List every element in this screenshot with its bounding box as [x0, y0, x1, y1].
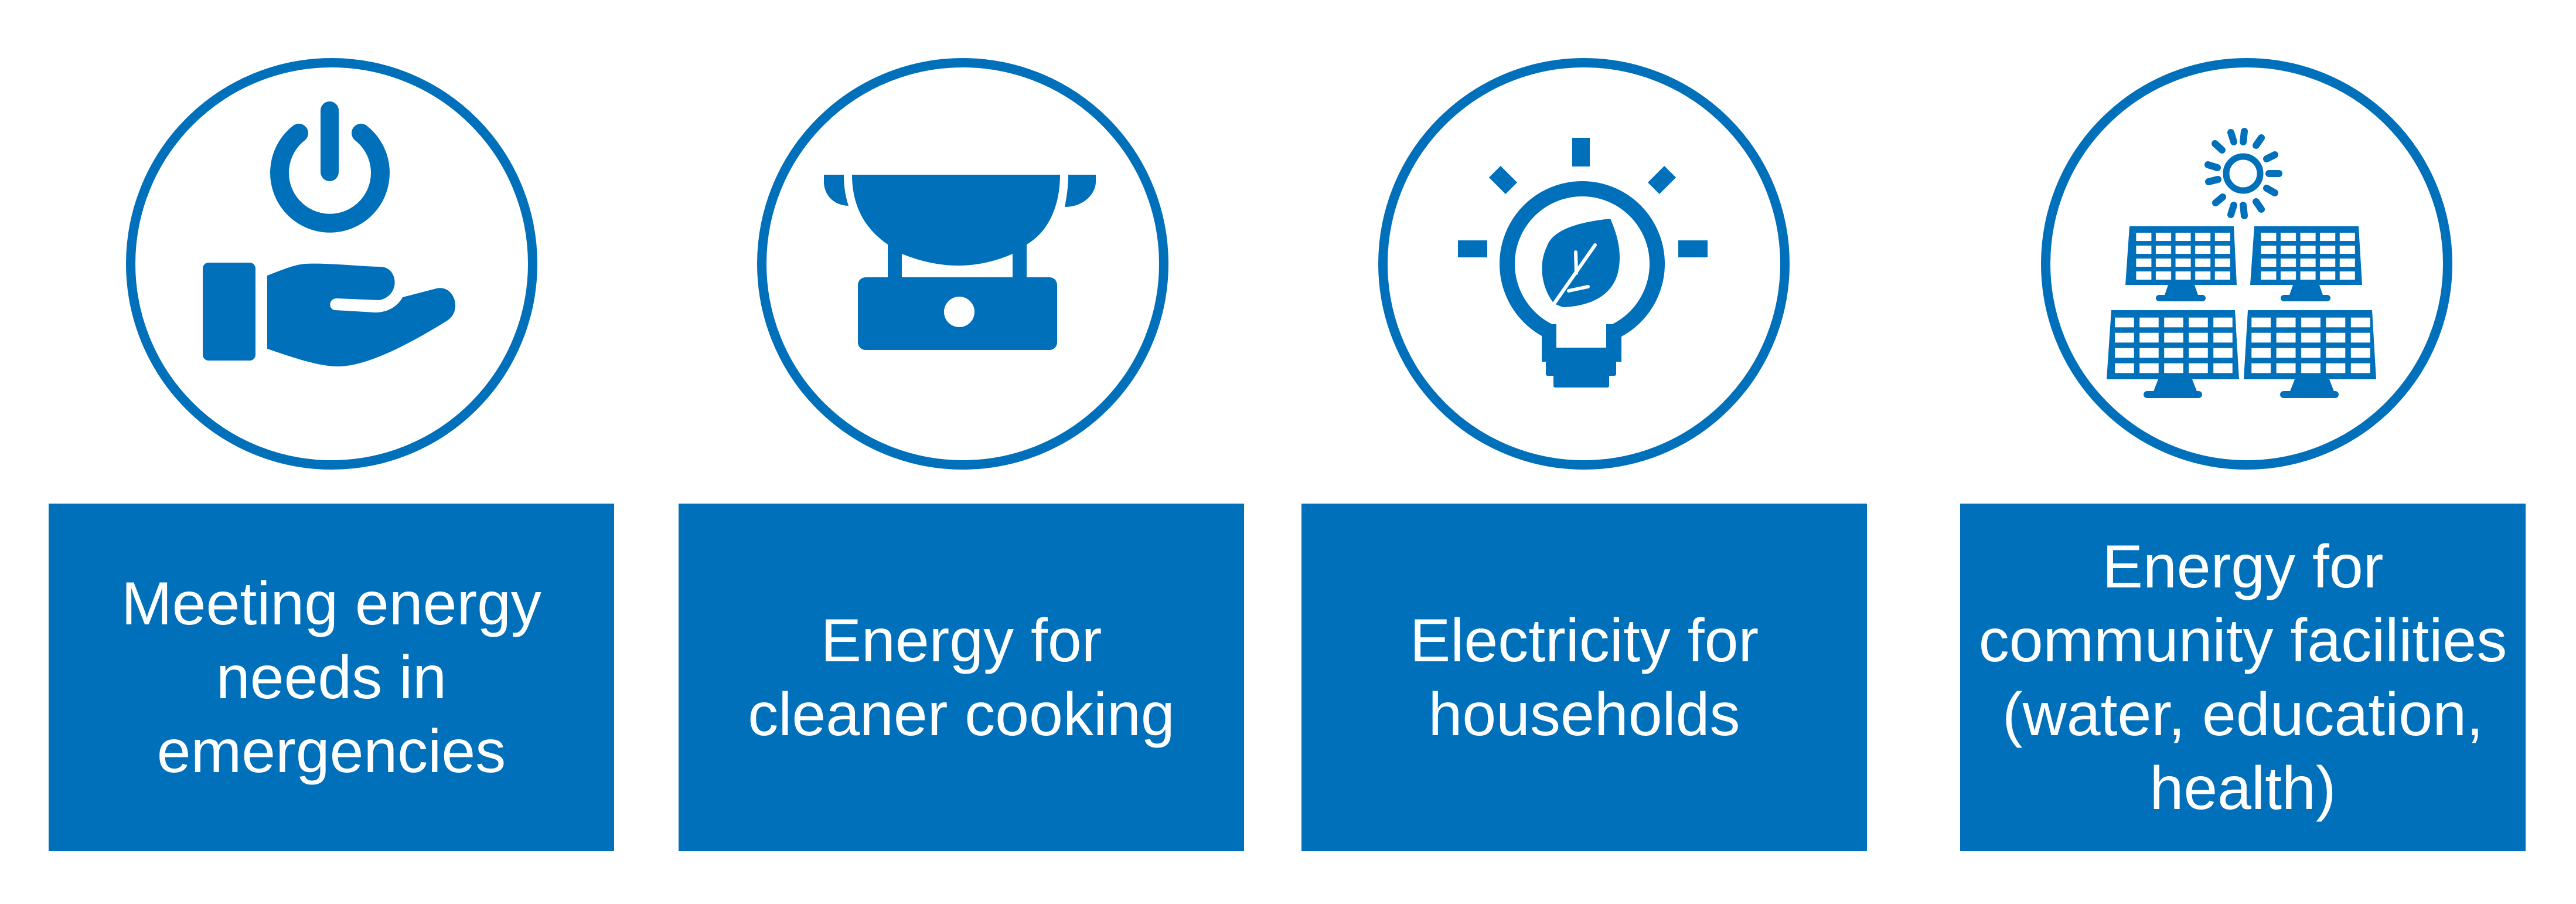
box: households: Electricity for	[1410, 606, 1759, 674]
icon: power symbol	[280, 101, 380, 223]
icon: pot on stove	[824, 175, 1096, 350]
box: community facilities	[1960, 504, 2526, 851]
icon circle 3: light bulb	[1383, 63, 1785, 465]
box: cooking: Energy for	[821, 606, 1102, 674]
icon: bulb with leaf	[1458, 138, 1708, 388]
icon circle 1: power in hand	[131, 63, 533, 465]
box: households	[1301, 504, 1867, 851]
box: community facilities: (water, education,	[2002, 680, 2483, 748]
box: community facilities: community facilities	[1979, 606, 2507, 674]
box: cooking	[679, 504, 1244, 851]
box: emergencies: emergencies	[157, 718, 506, 786]
icon circle 4: solar panels	[2046, 63, 2448, 465]
box: cooking: cleaner cooking	[748, 680, 1175, 748]
box: emergencies	[49, 504, 614, 851]
box: emergencies: Meeting energy	[121, 570, 541, 638]
icon: sun	[2208, 131, 2279, 216]
icon circle 2: cooking pot	[762, 63, 1164, 465]
box: community facilities: health)	[2149, 754, 2336, 822]
box: community facilities: Energy for	[2103, 532, 2383, 600]
box: households: households	[1429, 680, 1740, 748]
icon: hand	[203, 263, 455, 366]
icon: solar panels	[2107, 226, 2376, 398]
box: emergencies: needs in	[216, 644, 447, 712]
